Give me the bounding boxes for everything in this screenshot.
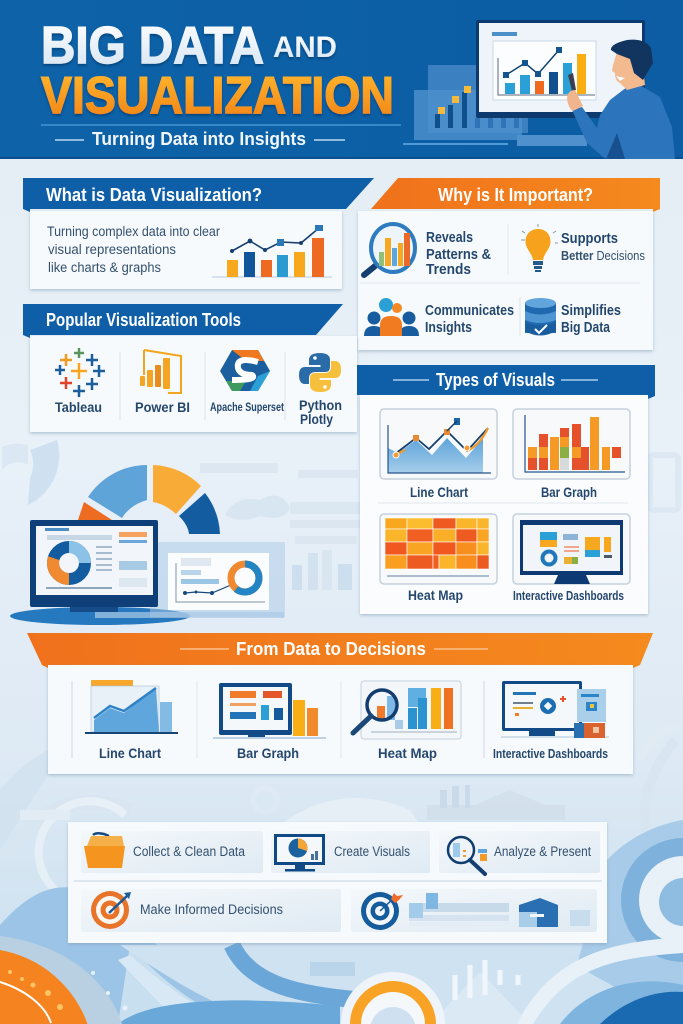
item: heat map <box>353 681 461 761</box>
tool: Python Plotly: Python <box>299 398 342 413</box>
card: heat map <box>380 514 497 603</box>
section header: Popular Visualization Tools <box>23 304 343 338</box>
step: create visuals: Create Visuals <box>334 844 410 859</box>
section header: Types of Visuals: Types of Visuals <box>436 370 555 390</box>
background decoration: middle and bottom shapes <box>0 440 683 1024</box>
step: create visuals <box>271 831 430 873</box>
panel: what is data visualization <box>30 211 342 289</box>
title: BIG DATA <box>41 17 264 75</box>
definition text <box>47 224 220 275</box>
text: simplifies big data: Big Data <box>561 320 611 336</box>
panel: types of visuals <box>360 395 648 614</box>
tool: Python Plotly <box>299 353 342 427</box>
icon: database with check <box>525 298 556 336</box>
panel: why is it important <box>358 211 653 350</box>
header banner <box>0 0 683 159</box>
combo chart <box>212 225 332 278</box>
main monitor <box>30 520 158 612</box>
card: interactive dashboards: Interactive Dashboards <box>513 588 624 603</box>
text: supports better decisions: Better Decisions <box>561 248 645 263</box>
illustration: laptop and gauge dashboard <box>10 465 285 625</box>
section header: Popular Visualization Tools: Popular Visualization Tools <box>46 310 241 330</box>
definition text: Turning complex data into clear <box>47 224 220 239</box>
card: heat map: Heat Map <box>408 588 463 603</box>
tool: Power BI: Power BI <box>135 400 190 415</box>
panel: process steps <box>68 822 607 943</box>
definition text: like charts & graphs <box>48 260 161 275</box>
item: interactive dashboards <box>493 681 609 761</box>
step: make informed decisions <box>81 889 341 932</box>
illustration: presentation monitor <box>476 20 645 118</box>
icon: light bulb <box>521 224 558 272</box>
secondary panel <box>168 553 269 610</box>
item: bar graph <box>213 683 326 761</box>
panel: from data to decisions <box>48 665 633 774</box>
subtitle: Turning Data into Insights <box>92 128 306 149</box>
tool: Python Plotly: Plotly <box>300 412 333 427</box>
base ellipse <box>10 607 190 625</box>
illustration: rising bars behind monitor <box>403 65 587 146</box>
text: supports better decisions: Supports <box>561 231 618 247</box>
text: reveals patterns and trends: Patterns & <box>426 247 491 263</box>
section header: Why is It Important? <box>371 178 660 212</box>
illustration: target with progress bars and building <box>351 889 597 932</box>
tool: Apache Superset: Apache Superset <box>210 402 284 414</box>
section header: What is Data Visualization?: What is Data Visualization? <box>46 185 262 205</box>
illustration: presenter <box>567 40 675 159</box>
card: line chart: Line Chart <box>410 485 468 500</box>
section header: Types of Visuals <box>357 365 655 399</box>
section header: What is Data Visualization? <box>23 178 374 212</box>
text: reveals patterns and trends: Reveals <box>426 230 473 246</box>
title <box>41 17 394 125</box>
tool: Power BI <box>135 350 190 415</box>
section header: Why is It Important?: Why is It Important? <box>438 185 593 205</box>
item: bar graph: Bar Graph <box>237 746 299 761</box>
text: communicates insights: Communicates <box>425 303 514 319</box>
panel: popular visualization tools <box>30 336 357 432</box>
text: communicates insights <box>425 303 514 336</box>
card: bar graph <box>513 409 630 500</box>
item: heat map: Heat Map <box>378 746 437 761</box>
gauge chart <box>78 465 220 534</box>
section header: From Data to Decisions: From Data to Decisions <box>236 639 426 659</box>
card: line chart <box>380 409 497 500</box>
tool: Apache Superset <box>210 350 284 414</box>
icon: magnifier with bars <box>364 224 415 275</box>
text: simplifies big data: Simplifies <box>561 303 621 319</box>
step: analyze and present: Analyze & Present <box>494 844 591 859</box>
card: interactive dashboards <box>513 514 630 603</box>
step: analyze and present <box>439 831 600 874</box>
item: interactive dashboards: Interactive Dashboards <box>493 746 608 761</box>
icon: people <box>364 298 419 336</box>
step: collect and clean data: Collect & Clean Data <box>133 844 245 859</box>
step: collect and clean data <box>81 831 263 873</box>
item: line chart: Line Chart <box>99 746 161 761</box>
tool: Tableau: Tableau <box>55 400 102 415</box>
step: make informed decisions: Make Informed Decisions <box>140 902 283 917</box>
text: simplifies big data <box>561 303 621 336</box>
item: line chart <box>85 680 178 761</box>
text: reveals patterns and trends <box>426 230 491 278</box>
text: supports better decisions <box>561 231 645 263</box>
title: AND <box>273 31 337 64</box>
title: VISUALIZATION <box>41 67 394 125</box>
text: reveals patterns and trends: Trends <box>426 262 471 278</box>
card: bar graph: Bar Graph <box>541 485 597 500</box>
section header: From Data to Decisions <box>27 633 653 668</box>
definition text: visual representations <box>48 242 176 257</box>
text: communicates insights: Insights <box>425 320 472 336</box>
tool: Tableau <box>55 348 105 415</box>
